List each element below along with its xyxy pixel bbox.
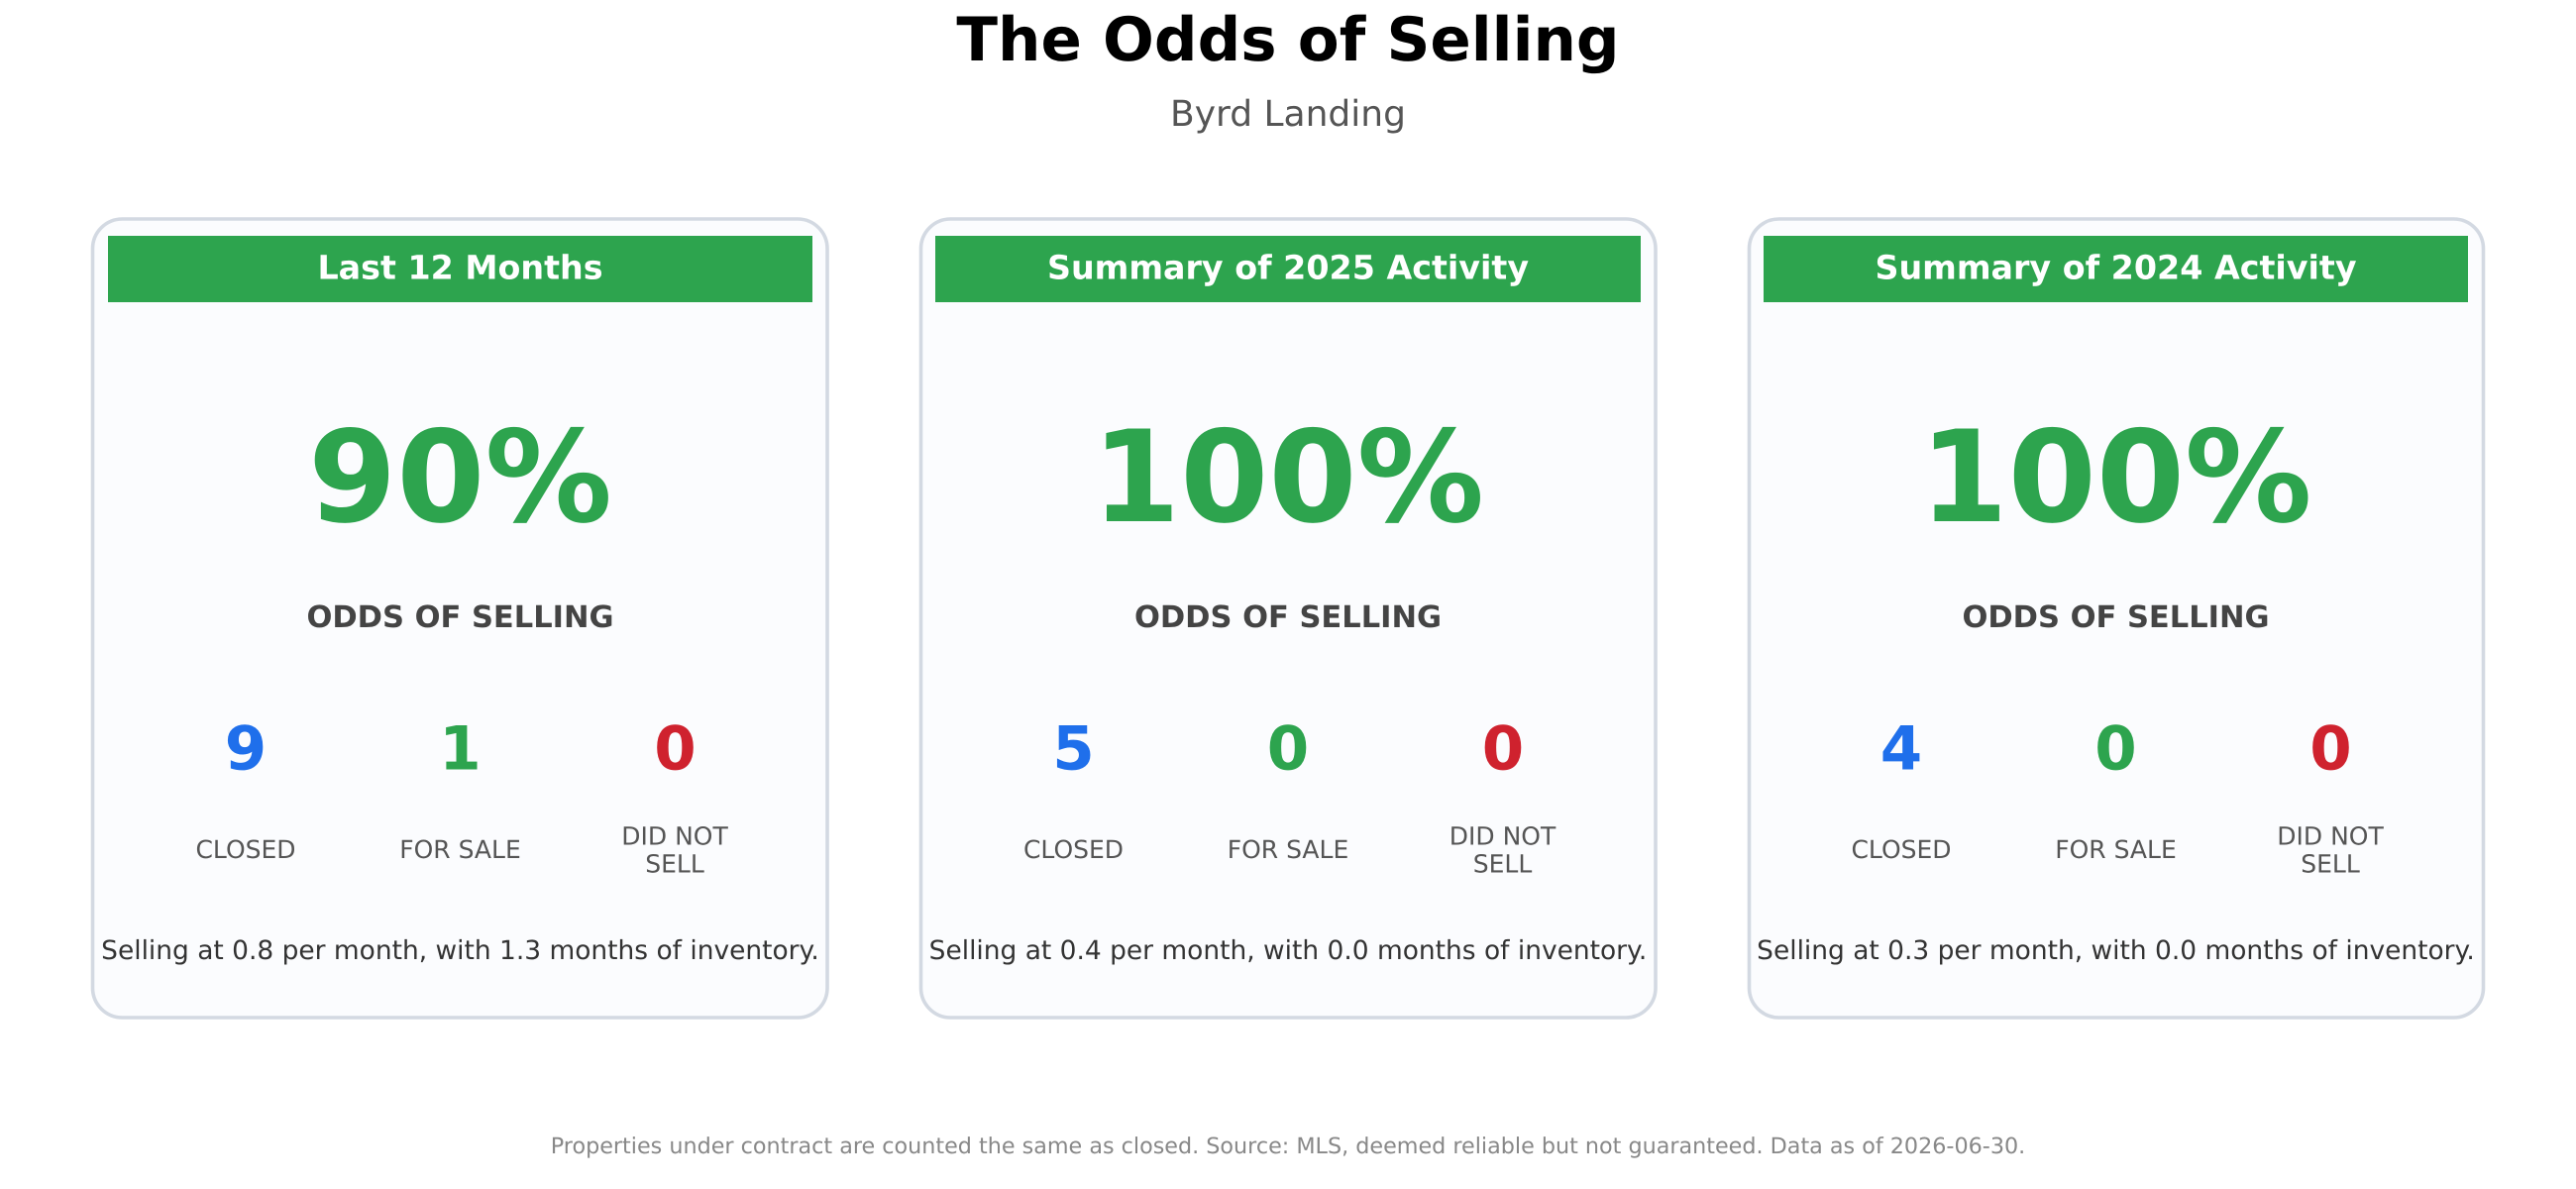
panel: 2024 activity bbox=[1750, 219, 2483, 1018]
panel header: last 12 months: Last 12 Months bbox=[317, 248, 603, 287]
stat: for sale bbox=[2055, 713, 2177, 864]
stat: closed: CLOSED bbox=[1023, 835, 1124, 864]
card background bbox=[921, 219, 1656, 1018]
title: The Odds of Selling bbox=[956, 5, 1620, 75]
card background bbox=[1750, 219, 2483, 1018]
stat: closed: CLOSED bbox=[1851, 835, 1952, 864]
summary sentence: Selling at 0.3 per month, with 0.0 months of inventory. bbox=[1757, 935, 2475, 966]
stat: did not sell bbox=[2277, 713, 2384, 878]
odds label: ODDS OF SELLING bbox=[1962, 600, 2270, 635]
stat: for sale: FOR SALE bbox=[399, 835, 521, 864]
summary sentence: Selling at 0.8 per month, with 1.3 months of inventory. bbox=[101, 935, 819, 966]
stat: for sale: 0 bbox=[2094, 713, 2137, 785]
footnote: Properties under contract are counted the same as closed. Source: MLS, deemed reliable but not guaranteed. Data as of 2026-06-30. bbox=[551, 1134, 2025, 1159]
panel header: 2024 bbox=[1764, 236, 2468, 302]
big percentage: 100% bbox=[1092, 404, 1484, 552]
stat: did not sell bbox=[621, 713, 728, 878]
stat: did not sell: SELL bbox=[645, 850, 704, 878]
stat: for sale: FOR SALE bbox=[1228, 835, 1348, 864]
stat: did not sell: 0 bbox=[1482, 713, 1524, 785]
panel header: 2024: Summary of 2024 Activity bbox=[1875, 248, 2357, 287]
stat: did not sell: DID NOT bbox=[1449, 822, 1556, 850]
stat: did not sell: SELL bbox=[1473, 850, 1532, 878]
panel: 2025 activity bbox=[921, 219, 1656, 1018]
stat: closed bbox=[1851, 713, 1952, 864]
summary sentence: Selling at 0.4 per month, with 0.0 months of inventory. bbox=[929, 935, 1647, 966]
stat: closed: CLOSED bbox=[195, 835, 296, 864]
stat: did not sell: 0 bbox=[654, 713, 697, 785]
panel header: last 12 months bbox=[108, 236, 812, 302]
stat: for sale bbox=[399, 713, 521, 864]
odds label: ODDS OF SELLING bbox=[1134, 600, 1442, 635]
stat: did not sell: SELL bbox=[2301, 850, 2360, 878]
stat: closed bbox=[1023, 713, 1124, 864]
stat: closed bbox=[195, 713, 296, 864]
odds label: ODDS OF SELLING bbox=[306, 600, 614, 635]
stat: closed: 5 bbox=[1052, 713, 1095, 785]
stat: closed: 9 bbox=[225, 713, 267, 785]
stat: for sale: FOR SALE bbox=[2055, 835, 2177, 864]
big percentage: 90% bbox=[308, 404, 612, 552]
stat: did not sell bbox=[1449, 713, 1556, 878]
stat: for sale bbox=[1228, 713, 1348, 864]
panel: last 12 months bbox=[93, 219, 827, 1018]
stat: did not sell: DID NOT bbox=[2277, 822, 2384, 850]
panel header: 2025: Summary of 2025 Activity bbox=[1047, 248, 1529, 287]
stat: for sale: 1 bbox=[439, 713, 482, 785]
subtitle: Byrd Landing bbox=[1170, 94, 1406, 135]
stat: for sale: 0 bbox=[1267, 713, 1309, 785]
stat: did not sell: DID NOT bbox=[621, 822, 728, 850]
card background bbox=[93, 219, 827, 1018]
big percentage: 100% bbox=[1919, 404, 2312, 552]
stat: did not sell: 0 bbox=[2309, 713, 2352, 785]
stat: closed: 4 bbox=[1880, 713, 1922, 785]
panel header: 2025 bbox=[935, 236, 1641, 302]
